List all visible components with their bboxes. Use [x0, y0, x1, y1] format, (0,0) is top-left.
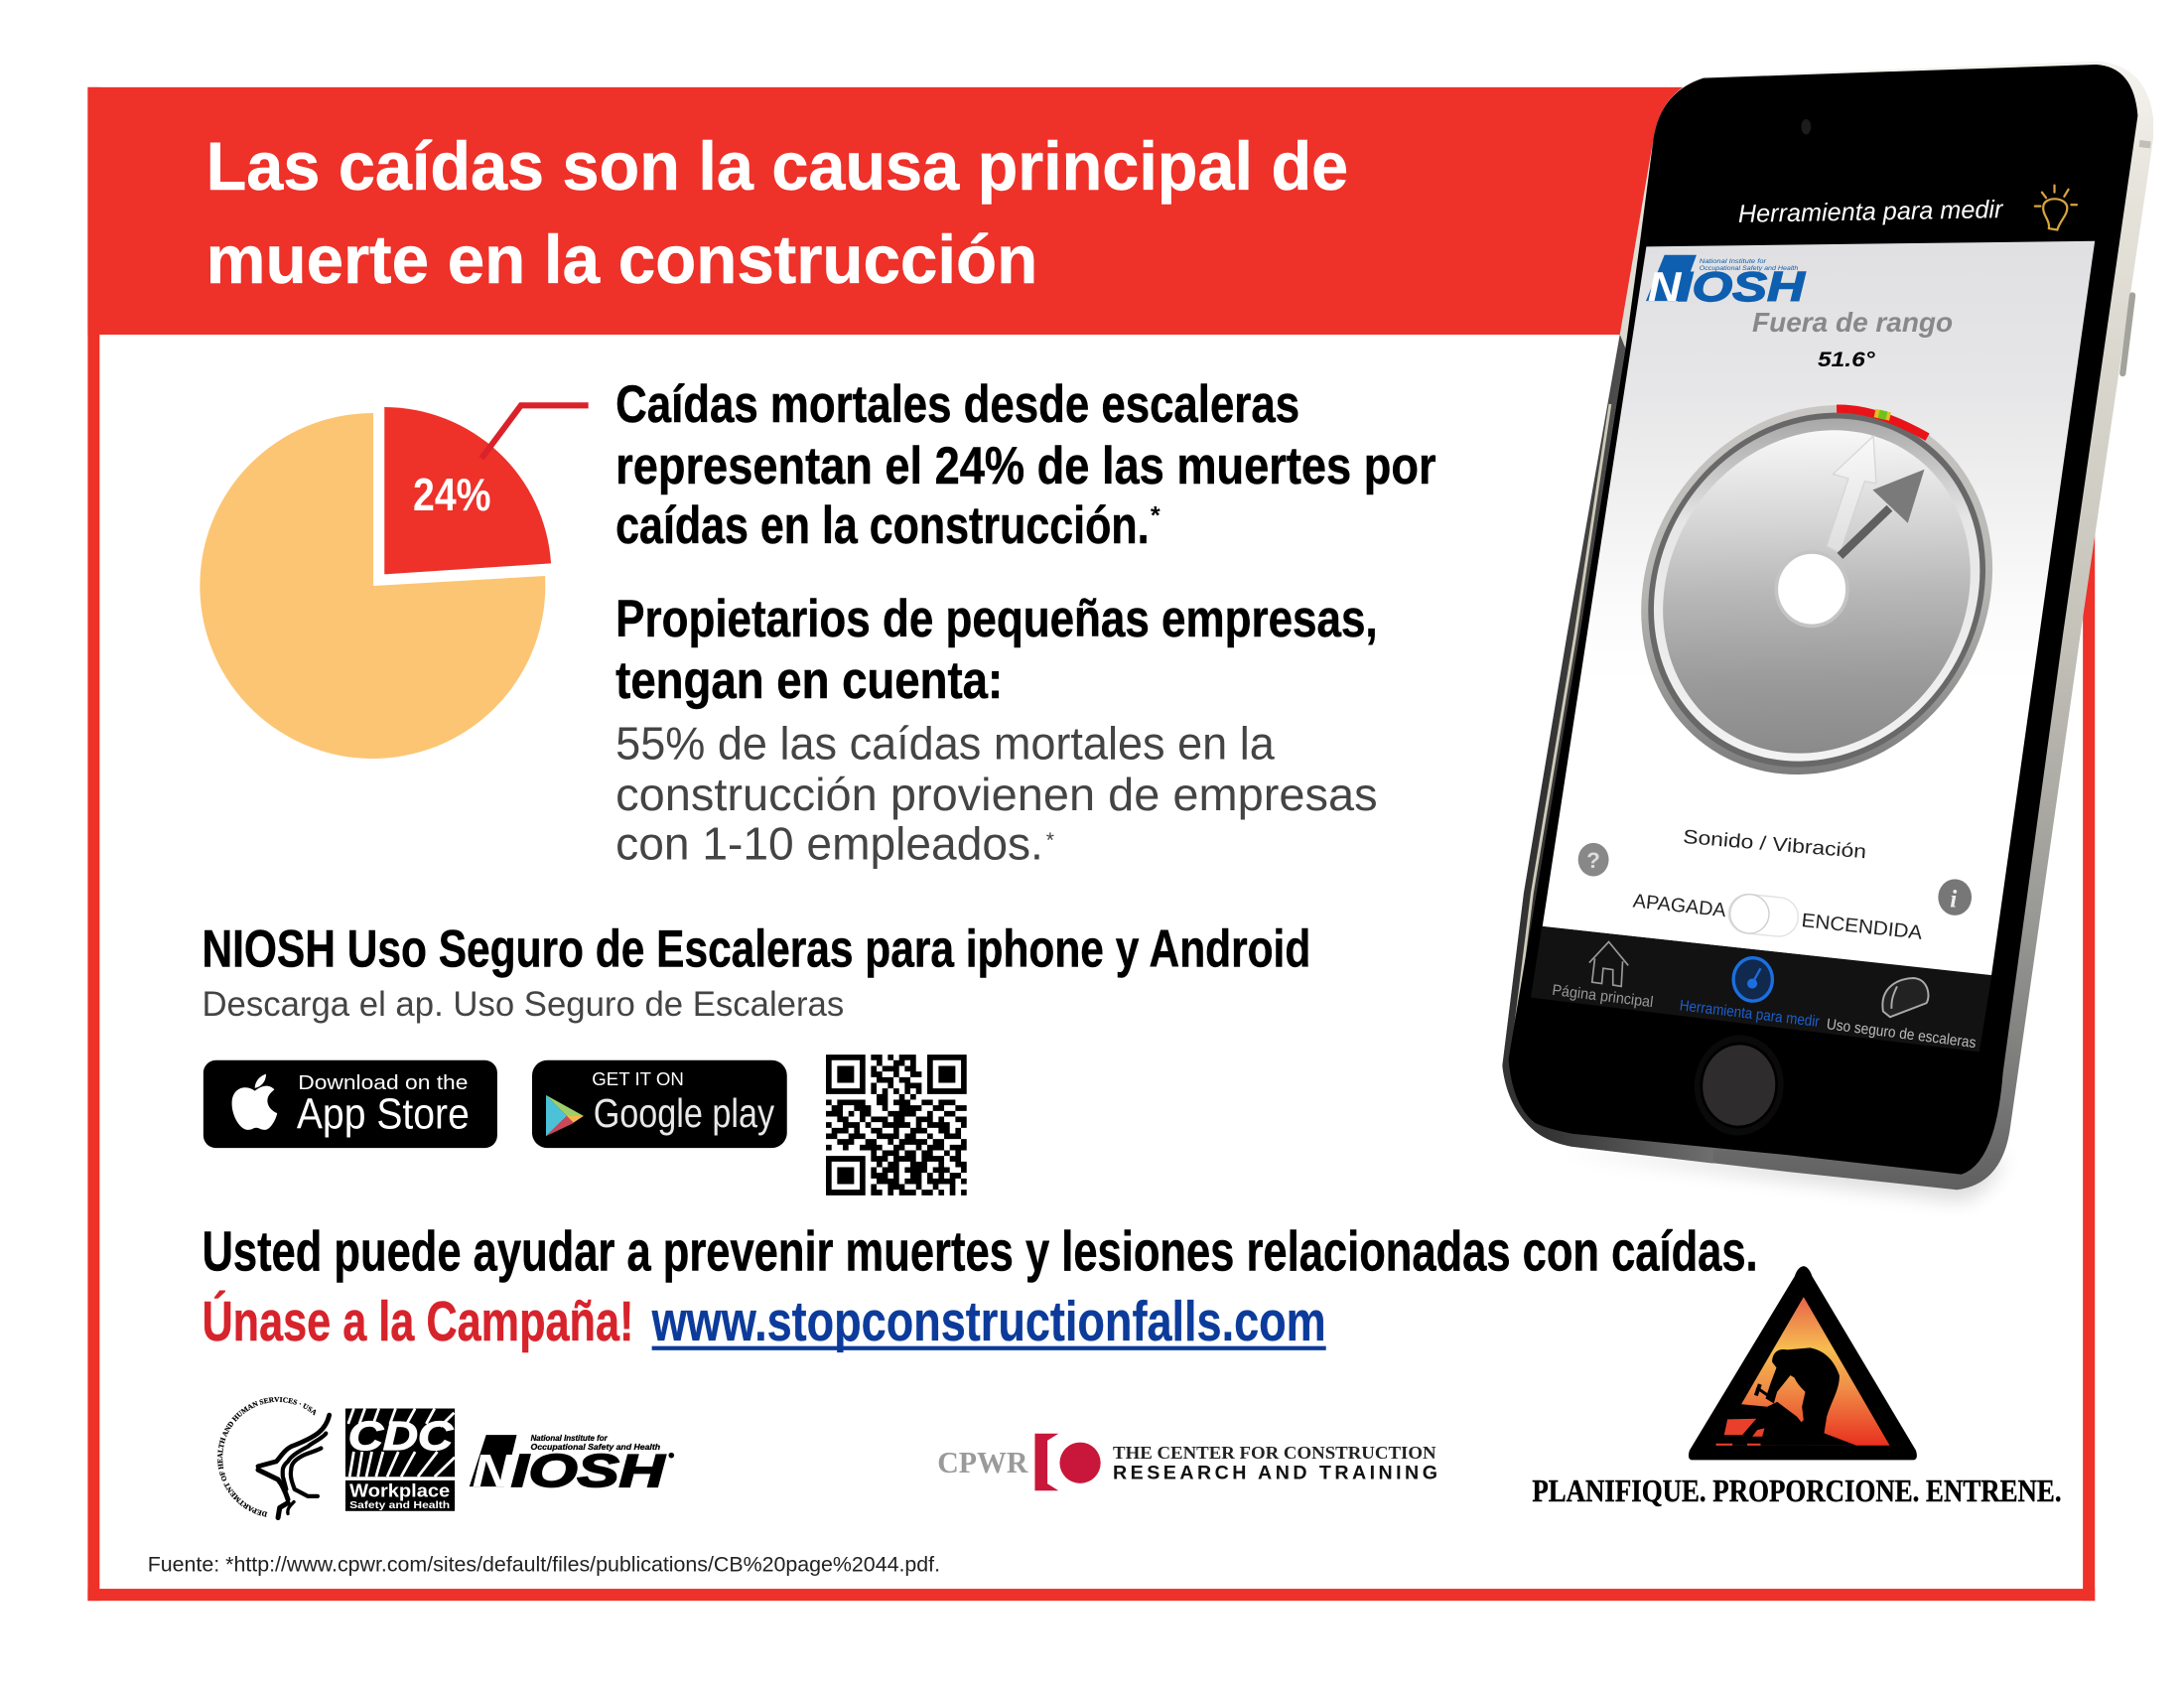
tab bar: [1531, 926, 1991, 1052]
icon: gauge: [1733, 958, 1772, 1001]
title: Las caídas son la causa principal de: [206, 128, 1348, 205]
left rim highlight: [1514, 404, 1610, 1038]
icon: home: [1589, 941, 1628, 986]
roofer silhouette: [1715, 1347, 1856, 1446]
text block: ladder fatal falls: [615, 375, 1436, 555]
dial hub: [1776, 552, 1847, 626]
button: App Store: App Store: [297, 1091, 470, 1139]
app heading: [202, 920, 1310, 1024]
icon: CPWR bracket and circle: [1034, 1434, 1101, 1490]
NIOSH logo on screen: National Institute for: [1700, 258, 1767, 265]
leader line: [481, 405, 589, 459]
status text: Fuera de rango: [1752, 307, 1953, 338]
app heading: NIOSH Uso Seguro de Escaleras para iphone y Android: [202, 920, 1310, 979]
logo: NIOSH black: IOSH: [511, 1445, 666, 1496]
text block: ladder fatal falls: *: [1151, 502, 1160, 530]
ghost arrow: [1827, 436, 1876, 553]
QR code: [826, 1057, 967, 1193]
button: Google Play: GET IT ON: [592, 1068, 684, 1089]
source footnote: Fuente: *http://www.cpwr.com/sites/default/files/publications/CB%20page%2044.pdf.: [148, 1554, 940, 1577]
needle arrow: [1840, 508, 1889, 556]
sound label: Sonido / Vibración: [1682, 826, 1867, 863]
logo: CPWR: CPWR: [937, 1446, 1028, 1479]
text block: ladder fatal falls: Caídas mortales desde escaleras: [615, 375, 1299, 434]
logo: CPWR: THE CENTER FOR CONSTRUCTION: [1113, 1443, 1436, 1463]
logo: NIOSH black: [470, 1433, 674, 1496]
logo: CPWR: RESEARCH AND TRAINING: [1113, 1462, 1437, 1483]
rim band: [2139, 144, 2150, 145]
campaign label: Únase a la Campaña!: [202, 1290, 633, 1352]
icon: info: i: [1950, 885, 1957, 913]
call to action text: Usted puede ayudar a prevenir muertes y lesiones relacionadas con caídas.: [202, 1220, 1758, 1283]
logo: CDC Workplace Safety and Health: Safety and Health: [349, 1499, 450, 1511]
NIOSH logo on screen: Occupational Safety and Health: [1700, 265, 1799, 272]
icon: warning triangle with roofer: [1689, 1266, 1917, 1460]
button: App Store: Download on the: [298, 1072, 468, 1094]
eagle: [258, 1415, 330, 1518]
text block: small business owners: *: [1046, 829, 1054, 852]
tab label: tool: Herramienta para medir: [1679, 997, 1821, 1031]
icon: question: [1578, 843, 1609, 877]
side button: [2122, 295, 2132, 373]
text block: small business owners: [615, 590, 1378, 870]
text block: ladder fatal falls: representan el 24% de las muertes por: [615, 437, 1436, 495]
dial: [1625, 402, 2009, 777]
home button: [1691, 1032, 1788, 1139]
logo: CDC Workplace Safety and Health: CDC: [348, 1413, 454, 1459]
icon: hard hat: [1882, 978, 1928, 1017]
text block: small business owners: Propietarios de pequeñas empresas,: [615, 590, 1378, 648]
slogan: PLANIFIQUE. PROPORCIONE. ENTRENE.: [1532, 1474, 2062, 1508]
text block: small business owners: con 1-10 empleados.: [615, 818, 1043, 870]
phone body rim: [1502, 62, 2153, 1190]
text block: small business owners: tengan en cuenta:: [615, 651, 1003, 710]
logo: CPWR: [937, 1434, 1437, 1490]
phone illustration: [1502, 62, 2153, 1200]
tab label: home: Página principal: [1552, 982, 1654, 1011]
icon: light bulb: [2035, 186, 2077, 230]
NIOSH logo on screen: IOSH: [1678, 263, 1807, 310]
logo: NIOSH black: National Institute for: [531, 1433, 608, 1443]
text block: small business owners: construcción provienen de empresas: [615, 769, 1378, 820]
NIOSH logo on screen: [1646, 255, 1807, 310]
tab label: safety: Uso seguro de escaleras: [1826, 1016, 1978, 1052]
button: Google Play: [532, 1060, 787, 1148]
NIOSH logo on screen: N: [1648, 263, 1683, 310]
campaign URL: www.stopconstructionfalls.com: [651, 1290, 1326, 1352]
pie chart: 24%: [200, 405, 589, 759]
phone front: [1509, 65, 2137, 1175]
title banner: [87, 87, 1815, 335]
title: muerte en la construcción: [206, 221, 1037, 298]
text block: small business owners: 55% de las caídas mortales en la: [615, 718, 1275, 770]
logo: CDC Workplace Safety and Health: [345, 1409, 455, 1511]
call to action text: [202, 1220, 1758, 1352]
icon: play triangle: [546, 1095, 584, 1136]
screen: [1543, 241, 2095, 976]
icon: info: [1938, 879, 1972, 915]
icon: question: ?: [1586, 848, 1600, 873]
camera: [1801, 119, 1811, 134]
angle reading: 51.6°: [1818, 349, 1875, 371]
logo: HHS seal: DEPARTMENT OF HEALTH AND HUMAN SERVICES · USA: [217, 1396, 316, 1517]
app heading: Descarga el ap. Uso Seguro de Escaleras: [202, 985, 844, 1024]
toggle on label: ENCENDIDA: [1801, 910, 1924, 944]
screen header title: Herramienta para medir: [1738, 196, 2004, 228]
toggle off label: APAGADA: [1632, 891, 1728, 921]
icon: apple: [232, 1074, 277, 1130]
title: [206, 128, 1348, 298]
logo: NIOSH black: N: [473, 1445, 514, 1496]
text block: ladder fatal falls: caídas en la construcción.: [615, 496, 1150, 555]
toggle: [1726, 893, 1800, 938]
pie label: 24%: [413, 469, 491, 520]
logo: NIOSH black: Occupational Safety and Health: [531, 1442, 660, 1452]
logo: CDC Workplace Safety and Health: Workplace: [349, 1480, 450, 1501]
left rim shading: [1502, 335, 1713, 1164]
range arc: [1837, 409, 1928, 437]
button: Google Play: Google play: [594, 1090, 775, 1136]
button: App Store: [204, 1060, 497, 1148]
